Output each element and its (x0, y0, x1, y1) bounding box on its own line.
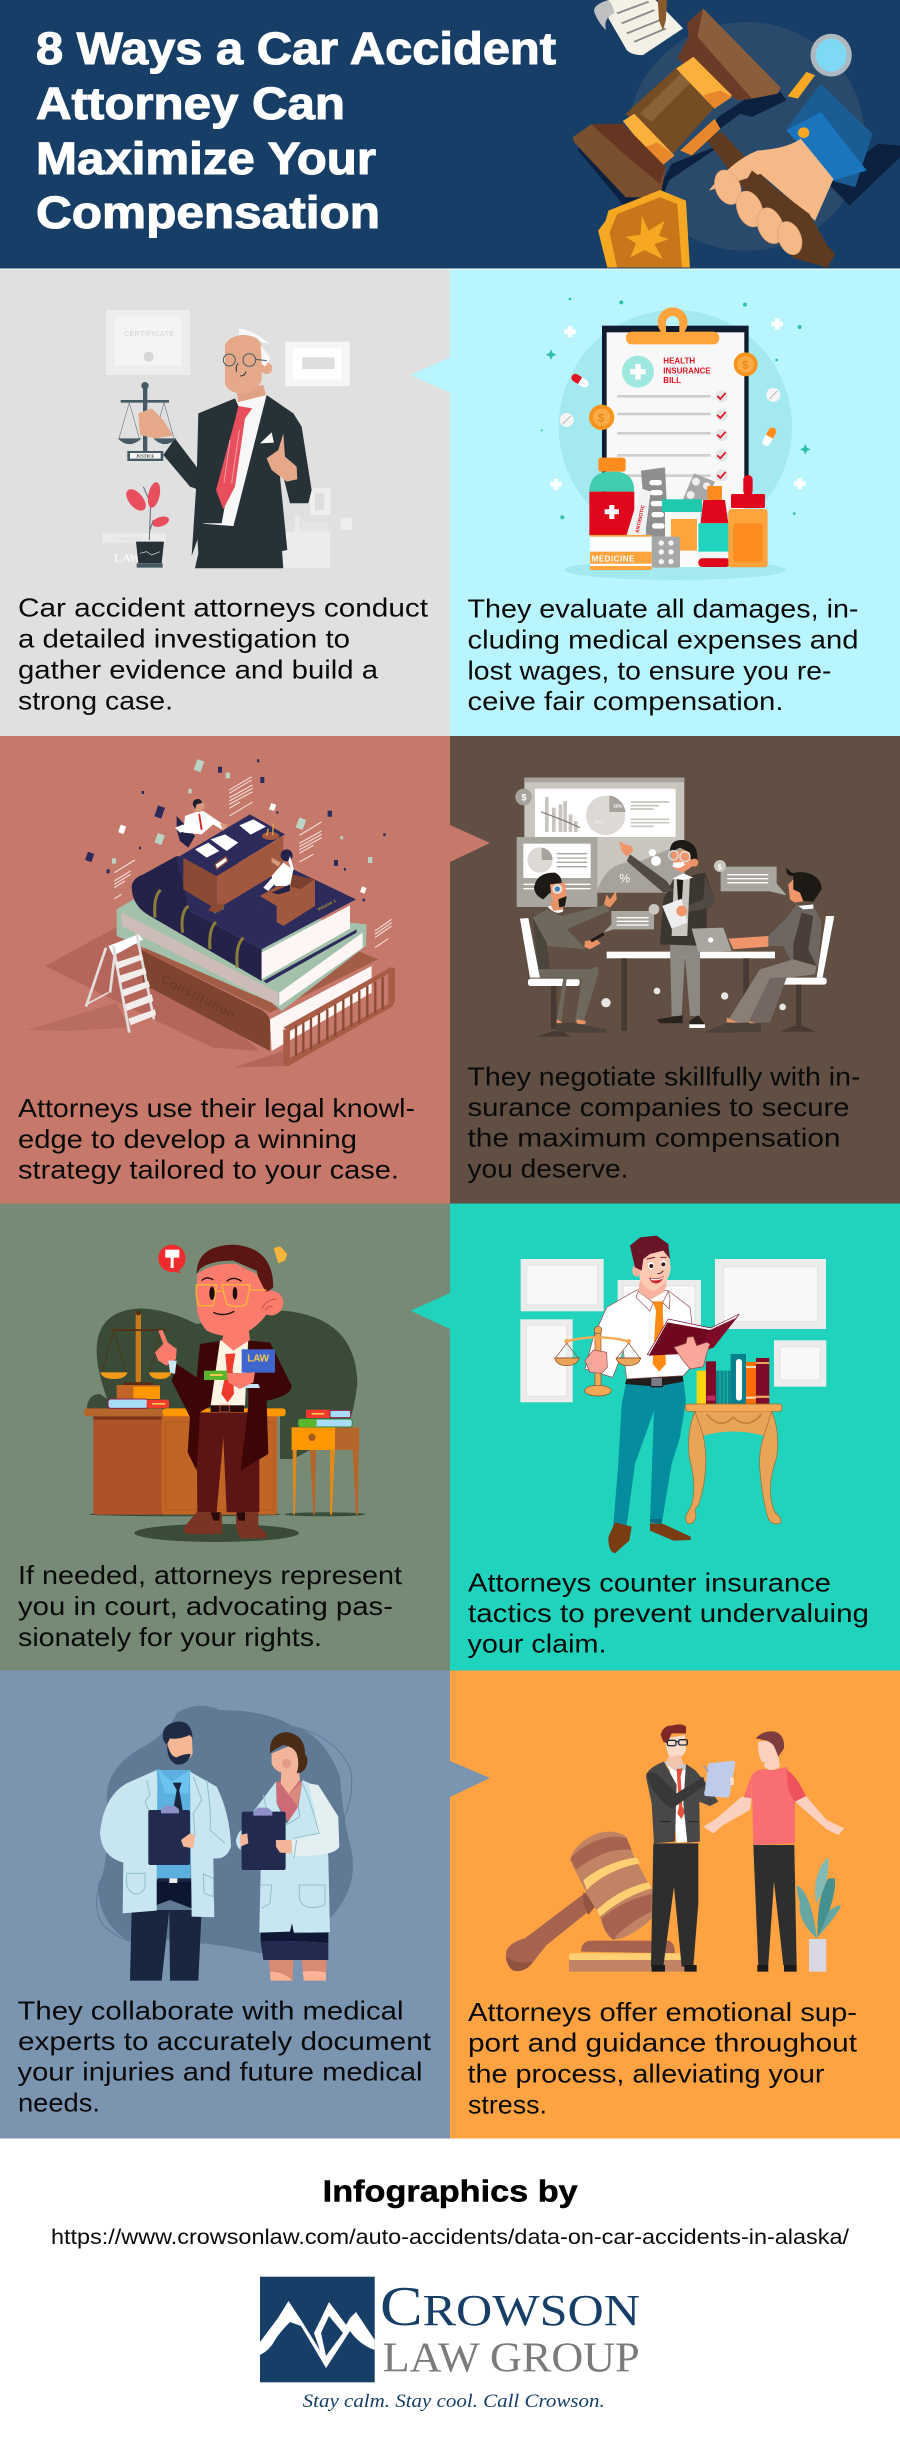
text block: sionately for your rights. (18, 1622, 322, 1652)
text block: If needed, attorneys represent (18, 1560, 403, 1590)
panel: negotiation (450, 736, 900, 1204)
text block: strong case. (18, 685, 173, 715)
illustration: books with courtroom desk: Volume 1 (316, 898, 337, 912)
icon: mountain mark (260, 2277, 375, 2382)
text block: They evaluate all damages, in- (468, 594, 858, 624)
illustration: health insurance bill and medicine: HEALTH (663, 357, 695, 366)
text block: Attorneys offer emotional sup- (468, 1997, 857, 2027)
text block: port and guidance throughout (468, 2028, 858, 2058)
text block: ceive fair compensation. (468, 686, 784, 716)
illustration: health insurance bill and medicine (541, 298, 811, 580)
text block (18, 593, 429, 715)
wordmark: Crowson: CROWSON (380, 2276, 640, 2338)
arrow: panel 5 to panel 6 (411, 1293, 450, 1329)
text block: the maximum compensation (468, 1123, 840, 1153)
illustration: lawyer, client, gavel and plant (506, 1724, 844, 1972)
text block: you in court, advocating pas- (18, 1591, 393, 1621)
text block: Attorneys use their legal knowl- (18, 1093, 415, 1123)
text block: your claim. (468, 1629, 606, 1659)
text block: edge to develop a winning (18, 1124, 357, 1154)
footer (51, 2174, 849, 2412)
text block: surance companies to secure (468, 1092, 850, 1122)
illustration: team meeting with charts: % (619, 872, 630, 886)
wordmark: Law Group: LAW GROUP (383, 2336, 640, 2382)
title: Maximize Your (36, 133, 376, 184)
text block: the process, alleviating your (468, 2058, 825, 2088)
panel: insurance tactics (450, 1204, 900, 1670)
panel: investigation (0, 270, 450, 736)
panel: medical experts (0, 1670, 450, 2138)
text block: a detailed investigation to (18, 624, 350, 654)
panel: legal strategy (0, 736, 450, 1204)
text block (468, 594, 858, 716)
illustration: team meeting with charts: 25% (613, 804, 622, 809)
header banner (0, 0, 900, 268)
illustration: health insurance bill and medicine: INSURANCE (663, 366, 711, 375)
title (36, 23, 556, 238)
text block (18, 1093, 415, 1185)
illustration: health insurance bill and medicine: MEDICINE (592, 555, 635, 564)
text block: lost wages, to ensure you re- (468, 655, 832, 685)
illustration: attorney with scales (102, 310, 352, 568)
illustration: health insurance bill and medicine: ANTIBIOTIC (635, 504, 647, 534)
illustration: attorney with scales: LAW (114, 551, 141, 565)
illustration: two doctors with clipboards (97, 1706, 353, 1981)
illustration: books with courtroom desk: The (210, 902, 226, 916)
title: 8 Ways a Car Accident (36, 23, 556, 74)
text block (18, 1560, 403, 1652)
text block: cluding medical expenses and (468, 624, 858, 654)
illustration: books with courtroom desk (27, 759, 396, 1068)
illustration: team meeting with charts: $ (521, 793, 527, 803)
panel: court representation (0, 1204, 450, 1670)
illustration: health insurance bill and medicine: BILL (663, 376, 681, 385)
illustration: books with courtroom desk: Constitution (159, 972, 238, 1022)
illustration: team meeting with charts: 75% (595, 820, 603, 825)
text block: Attorneys counter insurance (468, 1567, 831, 1597)
title: Attorney Can (36, 78, 345, 129)
text block: stress. (468, 2089, 547, 2119)
source url: https://www.crowsonlaw.com/auto-accidents/data-on-car-accidents-in-alaska/ (51, 2226, 849, 2249)
panel: emotional support (450, 1670, 900, 2138)
text block: They negotiate skillfully with in- (468, 1061, 860, 1091)
illustration: lawyer at desk: LAW (247, 1354, 270, 1365)
text block: They collaborate with medical (18, 1995, 403, 2025)
text block: experts to accurately document (18, 2026, 432, 2056)
text block (468, 1567, 869, 1659)
illustration: team meeting with charts: $ (718, 862, 722, 871)
illustration: team meeting with charts (515, 778, 834, 1037)
title: Compensation (36, 187, 380, 238)
tagline: Stay calm. Stay cool. Call Crowson. (303, 2391, 605, 2412)
text block: tactics to prevent undervaluing (468, 1598, 869, 1628)
text block: needs. (18, 2088, 100, 2118)
text block (468, 1061, 860, 1184)
text block: your injuries and future medical (18, 2057, 422, 2087)
arrow: panel 3 to panel 4 (450, 825, 490, 862)
icon: gavel, hand, badge and magnifier (573, 0, 900, 268)
panel: damages evaluation (450, 270, 900, 736)
illustration: health insurance bill and medicine: $ (742, 360, 749, 372)
illustration: lawyer at desk (84, 1245, 366, 1542)
arrow: panel 7 to panel 8 (450, 1761, 490, 1797)
text block: strategy tailored to your case. (18, 1155, 399, 1185)
illustration: attorney with scales: JUSTICE (136, 454, 154, 459)
illustration: attorney with scales: Constitution (113, 536, 142, 542)
text block (468, 1997, 858, 2119)
illustration: lawyer with book and scales (520, 1236, 826, 1553)
text block: gather evidence and build a (18, 654, 379, 684)
text block (18, 1995, 432, 2118)
illustration: health insurance bill and medicine: $ (598, 413, 605, 425)
text block: you deserve. (468, 1154, 628, 1184)
heading: infographics by: Infographics by (323, 2174, 579, 2209)
illustration: attorney with scales: CERTIFICATE (124, 331, 174, 338)
logo: Crowson Law Group (260, 2276, 640, 2412)
text block: Car accident attorneys conduct (18, 593, 429, 623)
arrow: panel 1 to panel 2 (411, 357, 450, 393)
